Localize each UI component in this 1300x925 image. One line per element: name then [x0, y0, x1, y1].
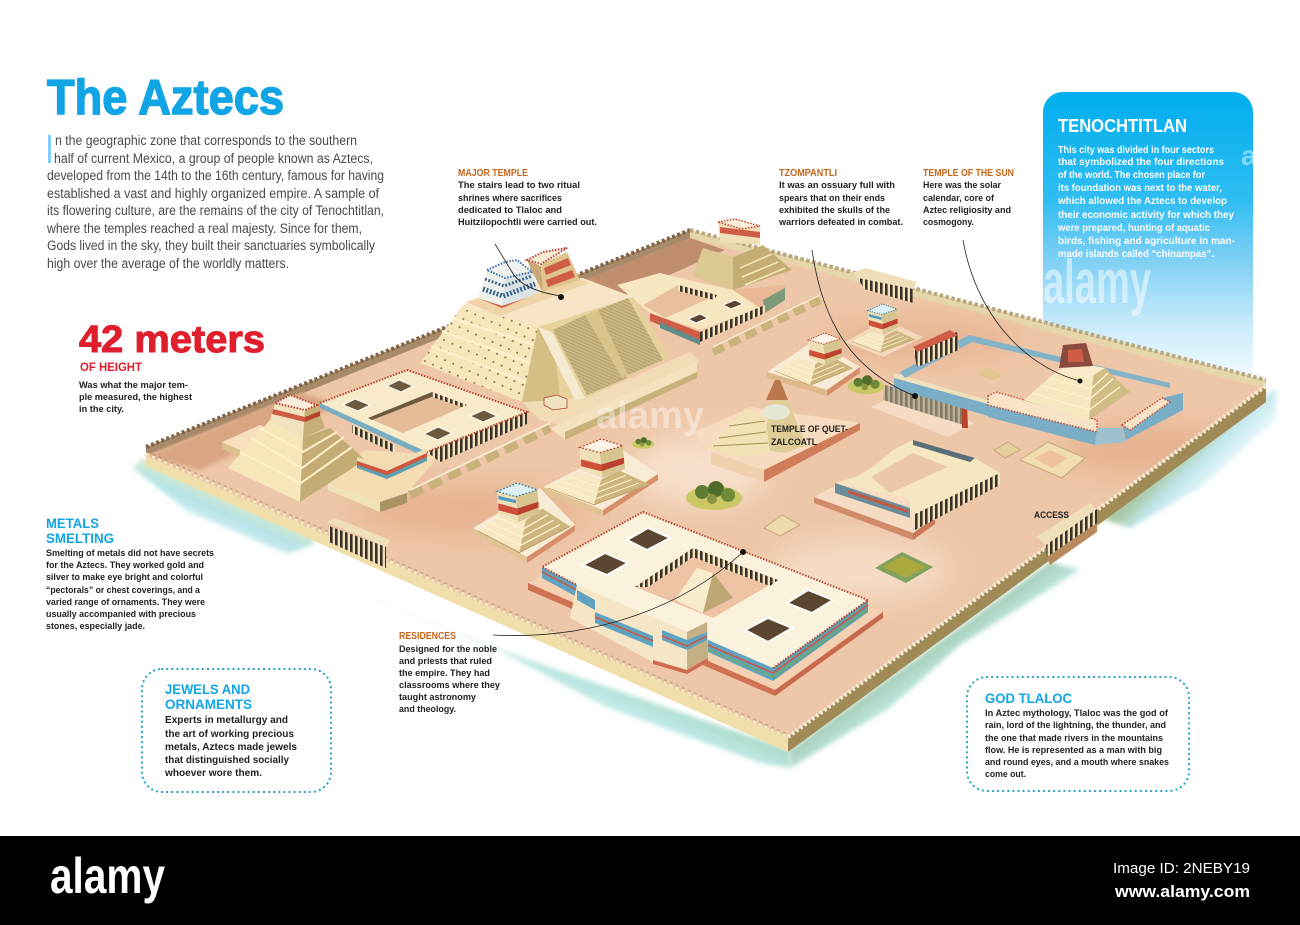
temple of the sun	[894, 330, 1183, 445]
label: access: ACCESS	[1034, 510, 1069, 521]
label: major temple: shrines where sacrifices	[458, 193, 562, 204]
low platform at temple foot	[520, 352, 700, 425]
text block: metals smelting: “pectorals” or chest coverings, and a	[46, 585, 201, 596]
text block: introduction: established a vast and highly organized empire. A sample of	[47, 186, 379, 201]
text block: introduction: where the temples reached a real majesty. Since for them,	[46, 221, 362, 236]
panel: god Tlaloc: GOD TLALOC	[985, 690, 1072, 706]
panel: god Tlaloc: rain, lord of the lightning, the thunder, and	[985, 720, 1166, 731]
front outer walls	[146, 452, 788, 752]
label: major temple	[458, 168, 597, 228]
panel: god Tlaloc: and round eyes, and a mouth where snakes	[985, 757, 1169, 768]
city plaza	[146, 230, 1266, 752]
text block: Tenochtitlan description: made islands called “chinampas”.	[1058, 249, 1214, 260]
stairs	[553, 315, 627, 395]
temple pyramids mid-left	[473, 439, 658, 563]
footer band	[0, 836, 1300, 925]
shrines	[478, 270, 505, 308]
label: major temple: Huitzilopochtli were carried out.	[458, 217, 597, 228]
label: residences: classrooms where they	[399, 680, 501, 691]
water	[133, 388, 1276, 768]
text block: Tenochtitlan description: its foundation was next to the water,	[1058, 183, 1222, 194]
label: residences: RESIDENCES	[399, 631, 456, 642]
label: temple of Quetzalcoatl: ZALCOATL	[771, 437, 817, 448]
text block: introduction: half of current Mexico, a group of people known as Aztecs,	[54, 151, 373, 166]
courtyard pyramid	[675, 568, 713, 613]
label: temple of Quetzalcoatl: TEMPLE OF QUET-	[771, 424, 848, 435]
label: residences: Designed for the noble	[399, 644, 497, 655]
trees	[632, 375, 884, 510]
roof	[542, 512, 868, 668]
text block: metals smelting	[46, 515, 214, 632]
leader line: tzompantli	[812, 250, 918, 399]
text block: metals smelting: silver to make eye bright and colorful	[46, 572, 203, 583]
text block: metals smelting: for the Aztecs. They worked gold and	[46, 560, 204, 571]
text block: Tenochtitlan description: were prepared, hunting of aquatic	[1057, 223, 1210, 234]
major temple	[420, 248, 700, 425]
base	[528, 512, 883, 690]
panel: jewels and ornaments: JEWELS AND	[165, 681, 250, 697]
panel: jewels and ornaments: the art of working precious	[165, 728, 294, 740]
panel: god Tlaloc: flow. He is represented as a man with big	[985, 745, 1162, 756]
courtyard	[635, 548, 778, 618]
central palace	[814, 440, 1000, 540]
small platforms	[764, 442, 1085, 536]
left palace	[320, 370, 527, 479]
label: temple of the sun	[923, 168, 1014, 228]
panel: jewels and ornaments: whoever wore them.	[164, 767, 262, 779]
text block: introduction: high over the average of the worldly matters.	[47, 256, 289, 271]
temple of Quetzalcoatl	[693, 380, 860, 482]
footer logo: alamy	[50, 848, 165, 904]
plaza floor	[146, 238, 1264, 737]
text block: Tenochtitlan description: of the world. The chosen place for	[1058, 170, 1205, 181]
label: major temple: dedicated to Tlaloc and	[458, 205, 562, 216]
text block: introduction: Gods lived in the sky, they built their sanctuaries symbolically	[47, 238, 375, 253]
text block: Tenochtitlan description: birds, fishing and agriculture in man-	[1058, 236, 1235, 247]
heading: Tenochtitlan: TENOCHTITLAN	[1058, 116, 1187, 136]
callout: 42 meters: ple measured, the highest	[79, 392, 193, 403]
access gate	[1036, 503, 1097, 565]
front-left gate	[327, 518, 390, 568]
text block: introduction: its flowering culture, are the remains of the city of Tenochtitlan,	[47, 203, 384, 218]
footer url: www.alamy.com	[1114, 882, 1250, 901]
low wall with stair gates	[410, 295, 820, 495]
watermark: alamy on panel: alamy	[1043, 248, 1151, 317]
label: residences: the empire. They had	[399, 668, 490, 679]
tzompantli	[871, 385, 975, 437]
label: temple of the sun: calendar, core of	[923, 193, 995, 204]
garden	[875, 552, 933, 583]
leader line: residences	[493, 549, 746, 636]
callout: 42 meters: Was what the major tem-	[79, 380, 188, 391]
text block: Tenochtitlan description: their economic activity for which they	[1058, 210, 1234, 221]
callout: 42 meters	[79, 319, 265, 415]
banded walls	[542, 567, 577, 597]
text block: introduction	[46, 133, 384, 271]
text block: metals smelting: varied range of ornaments. They were	[46, 597, 205, 608]
panel: god Tlaloc: the one that made rivers in the mountains	[985, 733, 1163, 744]
left large pyramid and platform	[222, 395, 440, 512]
temple pyramids centre	[767, 304, 923, 396]
back gate	[852, 268, 917, 303]
title: The Aztecs	[47, 71, 284, 125]
label: residences: and theology.	[399, 704, 456, 715]
panel: jewels and ornaments	[142, 669, 331, 792]
label: temple of the sun: Here was the solar	[923, 180, 1001, 191]
label: temple of Quetzalcoatl	[771, 424, 848, 448]
panel: jewels and ornaments: that distinguished socially	[165, 754, 289, 766]
roof lightwells	[583, 553, 628, 575]
label: residences	[399, 631, 501, 715]
text block: introduction: developed from the 14th to the 16th century, famous for having	[47, 168, 384, 183]
callout: 42 meters: in the city.	[79, 404, 124, 415]
label: major temple: MAJOR TEMPLE	[458, 168, 528, 179]
panel: jewels and ornaments: ORNAMENTS	[165, 696, 252, 712]
label: residences: taught astronomy	[399, 692, 477, 703]
leader line: major temple	[495, 244, 564, 300]
text block: metals smelting: usually accompanied with precious	[46, 609, 196, 620]
text block: metals smelting: SMELTING	[46, 530, 114, 546]
panel: god Tlaloc: In Aztec mythology, Tlaloc was the god of	[985, 708, 1169, 719]
label: tzompantli: warriors defeated in combat.	[778, 217, 903, 228]
panel: Tenochtitlan	[1043, 92, 1257, 392]
callout: 42 meters: 42 meters	[79, 319, 265, 361]
label: tzompantli: spears that on their ends	[779, 193, 885, 204]
footer image id: Image ID: 2NEBY19	[1113, 860, 1250, 877]
pyramid body	[420, 305, 538, 402]
terraced front pillar	[522, 327, 560, 402]
callout: 42 meters: OF HEIGHT	[80, 360, 143, 374]
panel: god Tlaloc: come out.	[985, 769, 1026, 780]
label: tzompantli	[778, 168, 903, 228]
label: temple of the sun: TEMPLE OF THE SUN	[923, 168, 1014, 179]
watermark: alamy on temple: alamy	[596, 395, 704, 437]
panel: jewels and ornaments: Experts in metallurgy and	[165, 714, 288, 726]
panel: god Tlaloc	[967, 677, 1189, 791]
panel: jewels and ornaments: metals, Aztecs made jewels	[165, 741, 297, 753]
label: tzompantli: It was an ossuary full with	[779, 180, 895, 191]
leader line: temple of the sun	[963, 240, 1082, 384]
back-right palace and stepped pyramid	[617, 219, 792, 345]
residences	[528, 512, 883, 696]
panel: Tenochtitlan: a	[1241, 140, 1257, 171]
back walls	[146, 230, 690, 460]
label: tzompantli: TZOMPANTLI	[779, 168, 837, 179]
text block: metals smelting: Smelting of metals did not have secrets	[46, 548, 214, 559]
label: tzompantli: exhibited the skulls of the	[779, 205, 890, 216]
text block: metals smelting: METALS	[46, 515, 99, 531]
label: temple of the sun: Aztec religiosity and	[923, 205, 1011, 216]
label: residences: and priests that ruled	[399, 656, 492, 667]
text block: Tenochtitlan description: that symbolized the four directions	[1058, 157, 1224, 168]
text block: Tenochtitlan description: This city was divided in four sectors	[1058, 145, 1214, 156]
label: temple of the sun: cosmogony.	[923, 217, 974, 228]
text block: Tenochtitlan description	[1057, 145, 1235, 260]
text block: metals smelting: stones, especially jade.	[46, 621, 145, 632]
text block: Tenochtitlan description: which allowed the Aztecs to develop	[1057, 196, 1227, 207]
front wing	[577, 575, 707, 632]
text block: introduction: n the geographic zone that corresponds to the southern	[55, 133, 357, 148]
label: major temple: The stairs lead to two ritual	[458, 180, 580, 191]
small altar at temple foot	[544, 395, 567, 410]
